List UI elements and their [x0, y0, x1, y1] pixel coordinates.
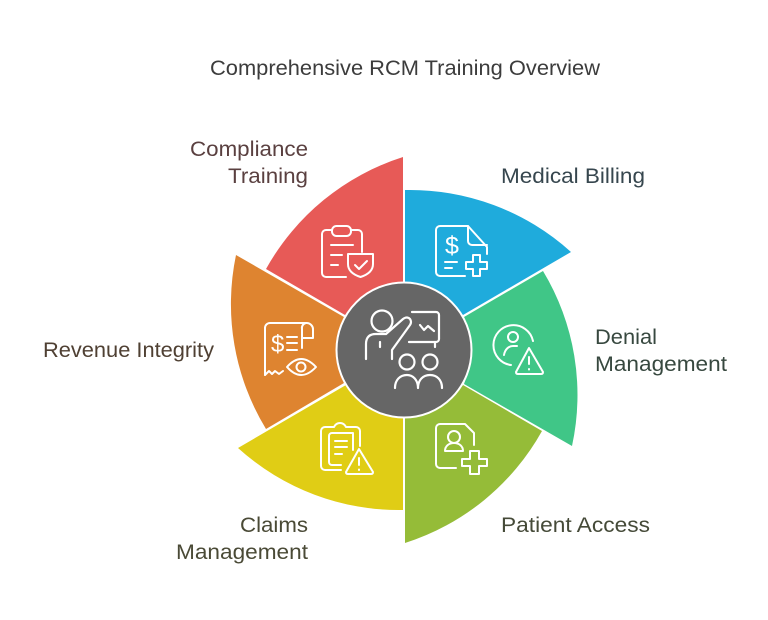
label: revenue integrity: Revenue Integrity: [43, 339, 215, 362]
segment: compliance training: [266, 157, 403, 315]
icon: clipboard with shield: [322, 226, 373, 277]
icon: bill with plus: [436, 226, 487, 276]
segment: medical billing: [405, 190, 571, 315]
icon: receipt with eye: [265, 323, 316, 375]
segment: denial management: [464, 271, 577, 446]
icon: patient document with plus: [436, 424, 487, 474]
icon: receipt with eye: $: [271, 331, 284, 358]
label: denial management: Management: [595, 353, 727, 376]
icon: trainer with audience: [366, 310, 442, 388]
label: claims management: Management: [176, 541, 308, 564]
label: compliance training: [190, 138, 308, 188]
label: denial management: Denial: [595, 326, 657, 349]
label: medical billing: Medical Billing: [501, 165, 645, 188]
segment: claims management: [238, 385, 403, 510]
segment: revenue integrity: [231, 255, 344, 429]
label: compliance training: Compliance: [190, 138, 308, 161]
label: patient access: Patient Access: [501, 514, 650, 537]
title: Comprehensive RCM Training Overview: [210, 57, 601, 80]
segment: patient access: [405, 385, 542, 543]
label: claims management: Claims: [240, 514, 308, 537]
icon: documents with warning: [321, 423, 373, 474]
icon: person with warning: [493, 325, 543, 374]
label: claims management: [176, 514, 308, 564]
label: compliance training: Training: [228, 165, 308, 188]
icon: bill with plus: $: [445, 232, 459, 260]
label: denial management: [595, 326, 727, 376]
wheel: [231, 157, 577, 543]
center circle: [336, 282, 472, 418]
